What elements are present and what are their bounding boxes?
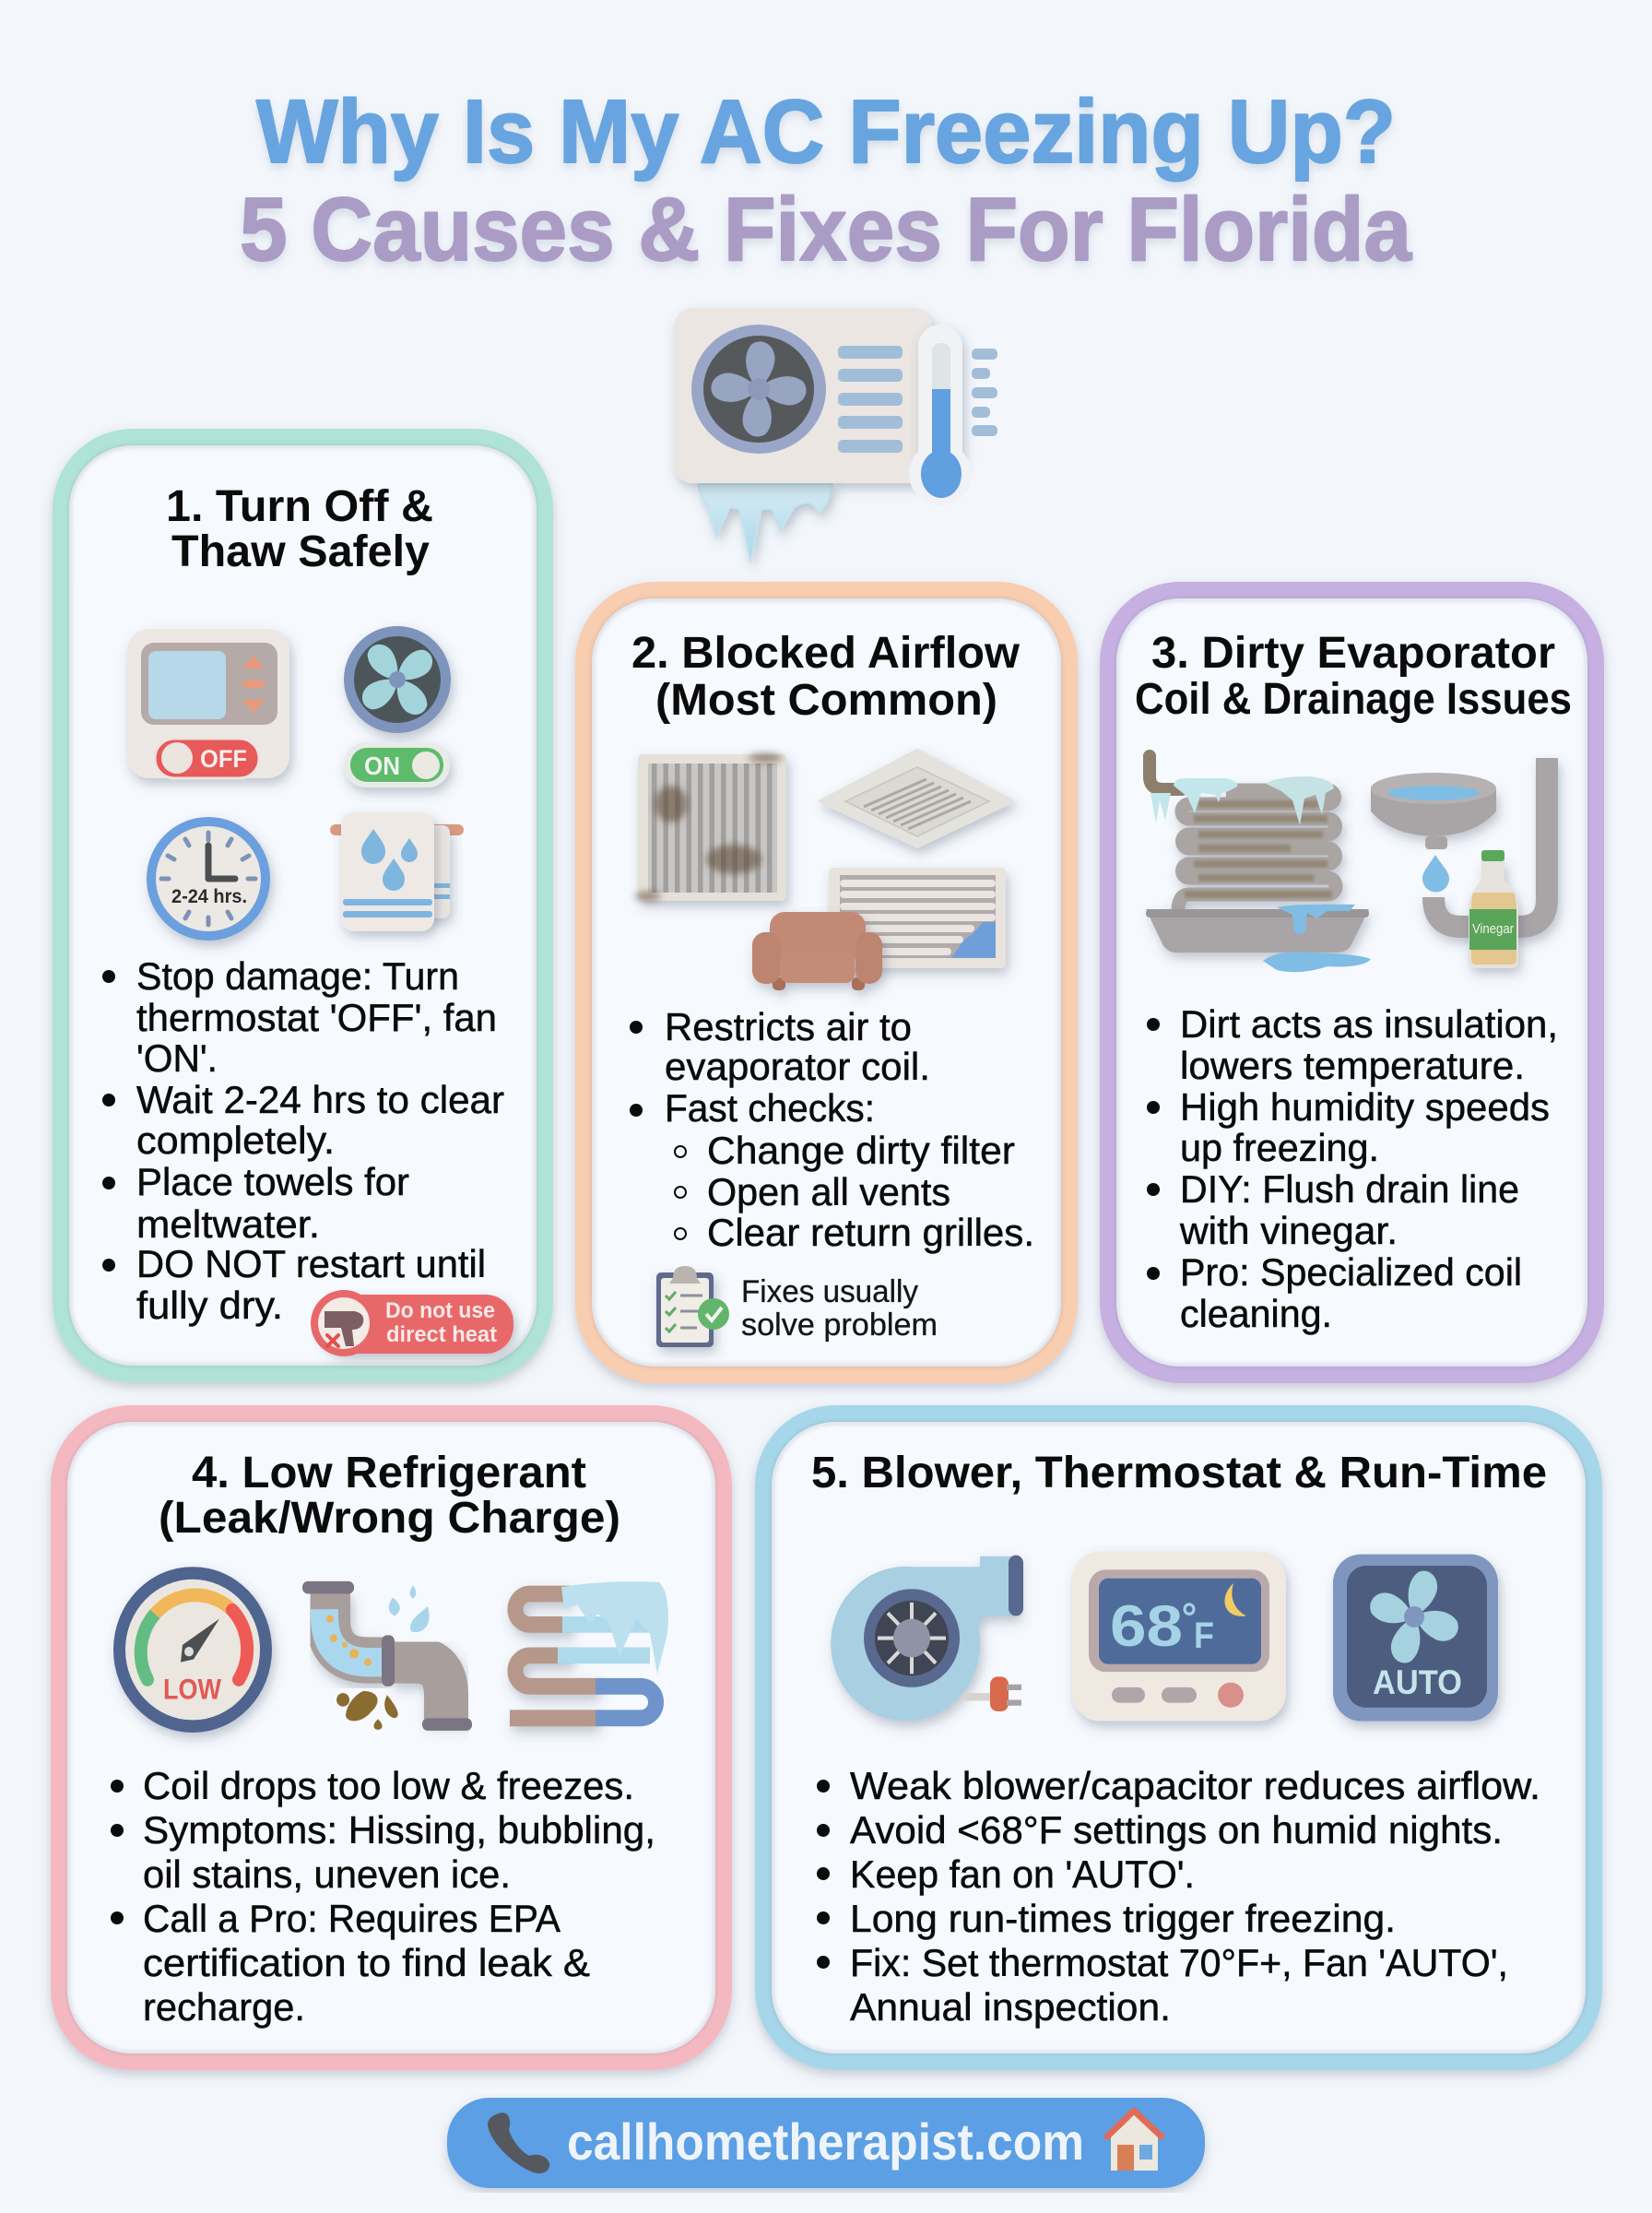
heading: (Leak/Wrong Charge) [159,1494,620,1543]
bullet list: Fast checks: [665,1086,875,1130]
heading: Thaw Safely [171,527,430,576]
icon: clock 2-24 hrs: 2-24 hrs. [171,886,247,907]
bullet list: Stop damage: Turn [136,954,459,998]
bullet list: oil stains, uneven ice. [143,1852,511,1896]
panel frame [59,1414,724,2062]
website address: callhometherapist.com [567,2112,1084,2171]
icon: iced refrigerant coil [510,1581,668,1718]
bullet list: DO NOT restart until [136,1242,486,1285]
panel: 5. blower, thermostat and run-time [763,1414,1594,2062]
heading: Coil & Drainage Issues [1135,675,1572,724]
heading: (Most Common) [655,676,997,725]
icon: frozen AC unit with thermometer [674,308,997,562]
callout: do not use direct heat: Do not use [385,1298,495,1323]
panel frame [1108,590,1596,1375]
heading [1135,629,1572,724]
bullet list: Place towels for [136,1160,409,1203]
icon: sofa chair [752,912,882,990]
icon: blower motor with plug [831,1556,1023,1721]
bullet list: Coil drops too low & freezes. [143,1764,634,1807]
panel: 1. turn off and thaw safely [61,437,545,1374]
bullet list: Symptoms: Hissing, bubbling, [143,1808,655,1852]
icon: thermostat 68°F: F [1194,1615,1214,1656]
icon: fan auto button: AUTO [1373,1663,1462,1701]
icon: thermostat 68°F [1072,1551,1286,1721]
bullet list [817,1764,1540,2029]
panel frame [584,590,1069,1375]
heading: 2. Blocked Airflow [631,629,1021,678]
panel: 2. blocked airflow [584,590,1069,1375]
bullet list: cleaning. [1180,1292,1332,1335]
icon: phone [488,2112,549,2173]
title [240,81,1412,279]
note: fixes usually solve problem: Fixes usually [741,1274,918,1309]
bullet list: evaporator coil. [665,1045,930,1088]
icon: clock 2-24 hrs [147,817,270,941]
bullet list: Pro: Specialized coil [1180,1250,1522,1294]
icon: fan on [344,626,451,787]
panel frame [61,437,545,1374]
heading [159,1449,620,1543]
icon: checklist clipboard [656,1266,729,1347]
bullet list: Keep fan on 'AUTO'. [850,1852,1195,1896]
icon: return grille blocked by sofa [752,868,1006,990]
heading [631,629,1021,725]
icon: wet towels [330,812,464,931]
bullet list: lowers temperature. [1180,1044,1525,1087]
callout: do not use direct heat: direct heat [386,1322,497,1347]
callout: do not use direct heat [311,1290,513,1356]
icon: low pressure gauge [113,1567,272,1733]
icon: dirty frozen coil over drain pan [1146,756,1371,972]
bullet list: Wait 2-24 hrs to clear [136,1078,504,1121]
heading: 3. Dirty Evaporator [1151,629,1555,678]
bullet list: Annual inspection. [850,1985,1171,2029]
icon: ceiling vent [820,751,1012,846]
icon: drain pan, drip and vinegar bottle: Vinegar [1472,921,1514,937]
icon: low pressure gauge: LOW [163,1673,221,1706]
title: Why Is My AC Freezing Up? [256,81,1396,182]
bullet list: Open all vents [707,1170,950,1213]
title: 5 Causes & Fixes For Florida [240,179,1412,279]
bullet list: 'ON'. [136,1036,218,1080]
bullet list: completely. [136,1118,335,1162]
panel frame [763,1414,1594,2062]
bullet list [111,1764,655,2029]
icon: thermostat off [127,629,289,778]
icon: thermostat 68°F: 68 [1110,1594,1183,1659]
heading: 4. Low Refrigerant [192,1449,586,1497]
heading [166,482,433,576]
bullet list: certification to find leak & [143,1941,590,1984]
panel: 3. dirty evaporator coil and drainage [1108,590,1596,1375]
note: fixes usually solve problem [741,1274,938,1343]
note: fixes usually solve problem: solve problem [741,1308,938,1343]
bullet list: meltwater. [136,1202,320,1246]
bullet list: Dirt acts as insulation, [1180,1002,1558,1046]
bullet list: DIY: Flush drain line [1180,1167,1519,1211]
bullet list: with vinegar. [1179,1209,1398,1252]
bullet list: Fix: Set thermostat 70°F+, Fan 'AUTO', [850,1941,1508,1984]
icon: drain pan, drip and vinegar bottle [1371,758,1547,968]
bullet list: High humidity speeds [1180,1085,1550,1129]
bullet list [1147,1002,1558,1335]
icon: fan on: ON [364,751,400,780]
heading: 1. Turn Off & [166,482,433,531]
bullet list: recharge. [143,1985,305,2029]
icon: house [1105,2111,1163,2171]
icon: dirty filter [635,753,786,901]
bullet list: Avoid <68°F settings on humid nights. [850,1808,1503,1852]
bullet list [630,1005,1034,1254]
bullet list: Clear return grilles. [707,1211,1034,1254]
bullet list: Change dirty filter [707,1129,1015,1172]
footer website pill [447,2098,1205,2188]
bullet list [102,954,504,1327]
icon: thermostat off: OFF [200,745,247,773]
bullet list: Call a Pro: Requires EPA [143,1897,560,1940]
bullet list: thermostat 'OFF', fan [136,996,497,1039]
icon: fan auto button [1333,1555,1498,1721]
bullet list: Weak blower/capacitor reduces airflow. [850,1764,1540,1807]
heading: 5. Blower, Thermostat & Run-Time [811,1449,1547,1497]
panel: 4. low refrigerant [59,1414,724,2062]
bullet list: fully dry. [136,1284,283,1327]
bullet list: Restricts air to [665,1005,912,1048]
icon: leaking pipe [302,1581,472,1731]
bullet list: Long run-times trigger freezing. [850,1897,1396,1940]
bullet list: up freezing. [1180,1126,1379,1169]
